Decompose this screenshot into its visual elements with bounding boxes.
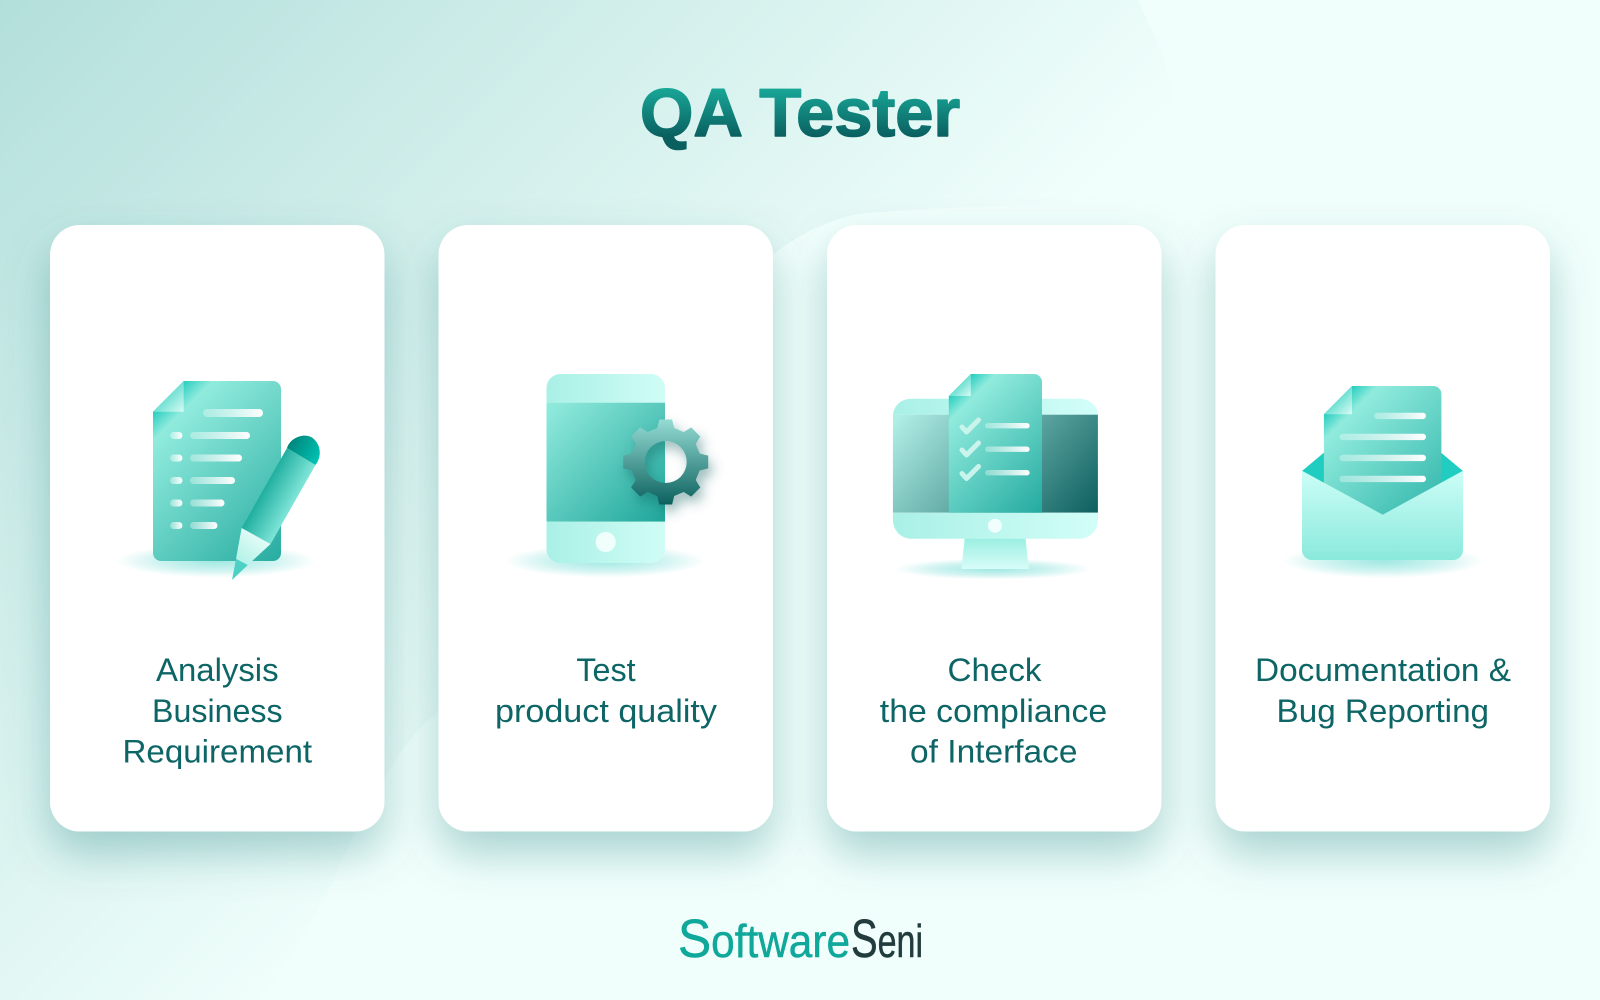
label: Analysis: [156, 652, 279, 688]
label: product quality: [495, 693, 718, 729]
icon: monitor with checklist: [893, 374, 1098, 580]
label: Documentation &: [1255, 652, 1511, 688]
label: Bug Reporting: [1277, 693, 1489, 729]
panel: documentation and bug reporting: [1216, 225, 1550, 832]
panel: test product quality: [438, 225, 773, 832]
title: QA Tester: [640, 75, 960, 151]
logo: SoftwareSeni: Software: [678, 909, 850, 969]
icon: document and pencil: [116, 381, 320, 580]
label: of Interface: [910, 734, 1078, 770]
panel: analysis business requirement: [50, 225, 384, 832]
label: Test: [576, 652, 636, 688]
label: [122, 652, 312, 770]
card background: [827, 225, 1162, 832]
label: [1255, 652, 1511, 729]
label: Business: [152, 693, 283, 729]
icon: envelope with document: [1283, 386, 1483, 578]
panel: check compliance of interface: [827, 225, 1162, 832]
logo: SoftwareSeni: Seni: [851, 909, 923, 969]
card background: [438, 225, 773, 832]
label: [495, 652, 718, 729]
card background: [50, 225, 384, 832]
card background: [1216, 225, 1550, 832]
label: the compliance: [880, 693, 1107, 729]
icon: phone and gear: [505, 374, 708, 578]
label: [880, 652, 1107, 770]
label: Check: [948, 652, 1042, 688]
label: Requirement: [122, 734, 312, 770]
